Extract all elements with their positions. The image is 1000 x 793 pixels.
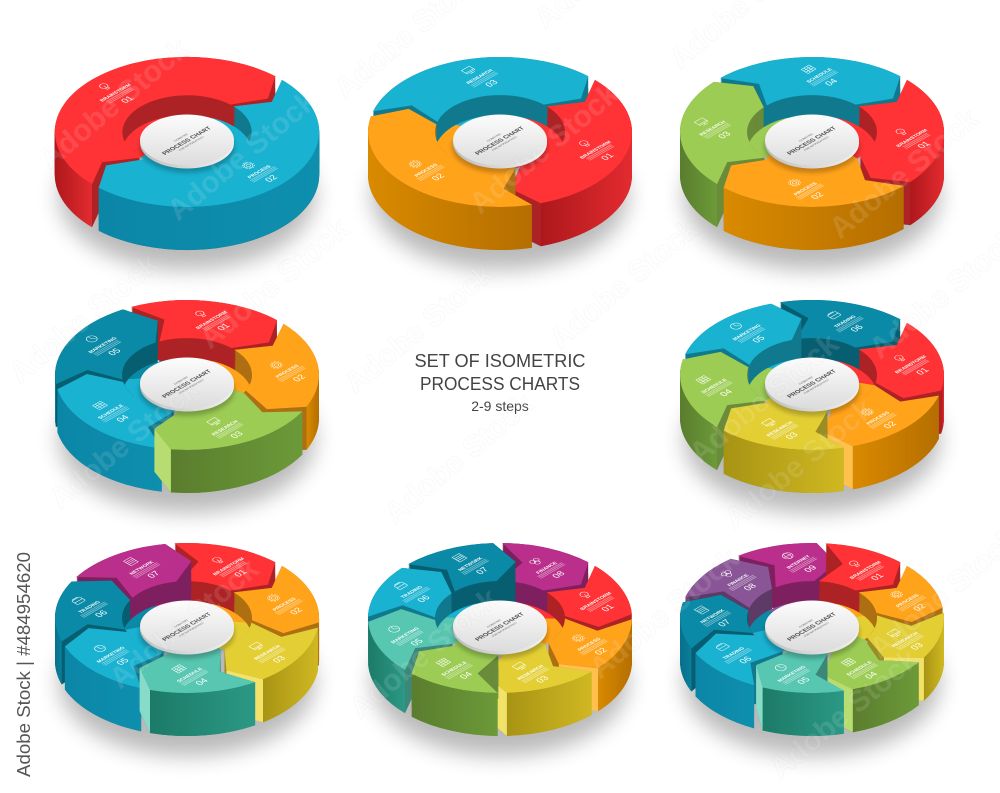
segment 03 research (373, 39, 596, 142)
center disc: ISOMETRIC (172, 619, 189, 628)
segment 01 brainstorm (838, 323, 983, 434)
segment 03 research: RESEARCH (891, 631, 921, 648)
segment 02 process (219, 566, 349, 665)
stock watermark: Adobe Stock (683, 327, 845, 470)
stock watermark: Adobe Stock (103, 552, 265, 695)
segment 07 network (408, 530, 528, 598)
title: 2-9 steps (471, 398, 529, 414)
segment 04 schedule (42, 371, 184, 492)
segment 02 process: 02 (881, 420, 898, 430)
segment 03 research: 03 (908, 641, 926, 651)
segment 04 schedule (809, 636, 919, 732)
stock watermark: Adobe Stock (161, 84, 323, 227)
segment 01 brainstorm (456, 80, 687, 246)
segment 03 research: 03 (228, 430, 245, 440)
segment 02 process: PROCESS (895, 593, 922, 608)
center disc: ISOMETRIC (797, 619, 814, 628)
center disc (452, 600, 548, 659)
segment 05 marketing (749, 647, 844, 736)
segment 02 process: 02 (911, 602, 928, 612)
segment 02 process: PROCESS (576, 637, 603, 652)
segment 07 network: 07 (473, 566, 491, 576)
center disc: FOR INFOGRAPHICS (802, 135, 830, 151)
segment 01 brainstorm: BRAINSTORM (849, 560, 883, 580)
chart: 6 steps (673, 300, 951, 524)
center disc: PROCESS CHART (474, 126, 527, 156)
segment 02 process: PROCESS (247, 164, 274, 180)
segment 03 research: RESEARCH (516, 664, 546, 681)
vertical stock id: Adobe Stock | #484954620 (14, 552, 34, 777)
segment 04 schedule: 04 (823, 77, 840, 87)
segment 02 process: 02 (290, 373, 308, 383)
segment 03 research: RESEARCH (211, 420, 240, 437)
segment 08 finance: FINANCE (726, 573, 751, 588)
segment 01 brainstorm: 01 (232, 568, 249, 578)
segment 05 marketing (345, 602, 465, 713)
segment 02 process: 02 (809, 191, 826, 201)
shadow (684, 365, 940, 513)
segment 02 process: 02 (429, 172, 447, 182)
stock watermark: Adobe Stock (763, 642, 925, 785)
center disc: PROCESS CHART (786, 612, 839, 642)
segment 02 process (850, 566, 961, 629)
segment 02 process: PROCESS (274, 364, 301, 379)
segment 04 schedule: 04 (717, 388, 735, 398)
segment 04 schedule: 04 (193, 677, 210, 687)
segment 04 schedule: 04 (862, 670, 880, 680)
chart: 4 steps (673, 57, 951, 282)
segment 05 marketing: MARKETING (776, 665, 808, 683)
segment 05 marketing: MARKETING (390, 627, 421, 645)
center disc (764, 600, 860, 659)
center disc: PROCESS CHART (161, 612, 214, 642)
shadow (59, 608, 315, 756)
segment 04 schedule: SCHEDULE (805, 67, 835, 84)
segment 05 marketing: 05 (750, 334, 767, 344)
segment 04 schedule: SCHEDULE (700, 378, 730, 395)
segment 01 brainstorm: 01 (915, 140, 932, 150)
segment 07 network (76, 531, 203, 604)
stock watermark: Adobe Stock (583, 542, 745, 685)
segment 03 research (715, 395, 844, 493)
chart: 3 steps (361, 57, 639, 282)
segment 01 brainstorm: BRAINSTORM (579, 591, 614, 611)
shadow (372, 122, 628, 270)
segment 06 trading: TRADING (722, 646, 747, 661)
segment 01 brainstorm: BRAINSTORM (579, 140, 613, 160)
stock watermark: Adobe Stock (543, 212, 705, 355)
center disc: PROCESS CHART (474, 612, 527, 642)
segment 02 process: PROCESS (272, 597, 299, 612)
segment 03 research (626, 73, 822, 227)
stock watermark: Adobe Stock (343, 582, 505, 725)
stock watermark: Adobe Stock (463, 77, 625, 220)
shadow (684, 122, 940, 270)
segment 03 research: 03 (534, 674, 551, 684)
center disc: ISOMETRIC (797, 376, 814, 385)
segment 06 trading (780, 287, 909, 355)
chart: 7 steps (48, 543, 326, 768)
chart: 5 steps (48, 300, 326, 524)
segment 04 schedule (720, 26, 916, 138)
segment 06 trading (31, 573, 145, 685)
title (414, 350, 586, 414)
stock watermark: Adobe Stock (378, 387, 540, 530)
segment 07 network (660, 590, 764, 692)
segment 02 process (200, 324, 367, 450)
segment 08 finance (685, 555, 783, 610)
segment 05 marketing: MARKETING (87, 336, 119, 354)
segment 04 schedule: SCHEDULE (440, 660, 470, 677)
center disc (452, 114, 548, 173)
chart: 2 steps (48, 56, 326, 282)
shadow (372, 608, 628, 756)
segment 02 process: PROCESS (865, 410, 892, 426)
segment 06 trading: TRADING (77, 600, 102, 614)
segment 07 network: NETWORK (128, 560, 156, 576)
segment 05 marketing (50, 622, 172, 731)
segment 08 finance (501, 543, 589, 591)
center disc (139, 358, 235, 416)
stock watermark: Adobe Stock (718, 392, 880, 535)
stock watermark: Adobe Stock (33, 32, 195, 175)
segment 05 marketing: 05 (408, 637, 425, 647)
segment 03 research (472, 638, 592, 736)
chart: 9 steps (673, 543, 951, 768)
segment 01 brainstorm: 01 (599, 152, 616, 162)
inner floor (750, 602, 874, 655)
segment 01 brainstorm: BRAINSTORM (195, 310, 229, 330)
center disc: PROCESS CHART (786, 369, 839, 399)
segment 01 brainstorm (802, 80, 998, 225)
segment 04 schedule: SCHEDULE (176, 667, 205, 684)
segment 03 research: RESEARCH (698, 120, 728, 137)
center disc: FOR INFOGRAPHICS (177, 135, 205, 151)
segment 02 process: 02 (592, 646, 610, 656)
segment 03 research: 03 (270, 654, 288, 664)
segment 01 brainstorm: 01 (599, 603, 616, 613)
segment 05 marketing: 05 (106, 347, 123, 357)
segment 01 brainstorm: BRAINSTORM (212, 557, 246, 577)
segment 02 process: PROCESS (793, 181, 820, 197)
segment 07 network: 07 (716, 618, 733, 628)
segment 06 trading (368, 568, 452, 618)
center disc: FOR INFOGRAPHICS (802, 621, 830, 637)
center disc (764, 114, 860, 173)
segment 01 brainstorm: 01 (914, 366, 931, 376)
stock watermark: Adobe Stock (193, 212, 355, 355)
stock watermark: Adobe Stock (3, 247, 165, 390)
segment 08 finance: FINANCE (535, 561, 560, 575)
shadow (684, 608, 940, 756)
segment 02 process (817, 381, 939, 489)
center disc: ISOMETRIC (172, 376, 189, 385)
center disc: ISOMETRIC (172, 133, 189, 142)
center disc (139, 114, 235, 173)
segment 01 brainstorm: 01 (869, 572, 886, 582)
segment 03 research: RESEARCH (465, 68, 495, 85)
segment 05 marketing: 05 (795, 676, 812, 686)
shadow (59, 122, 315, 270)
segment 01 brainstorm (175, 538, 280, 593)
center disc: PROCESS CHART (161, 126, 214, 156)
inner floor (750, 359, 874, 412)
title: SET OF ISOMETRIC (414, 350, 586, 371)
segment 09 internet: INTERNET (786, 555, 812, 570)
segment 01 brainstorm: BRAINSTORM (894, 355, 928, 375)
inner floor (750, 116, 874, 169)
segment 03 research (864, 613, 949, 701)
inner floor (124, 116, 250, 169)
center disc: FOR INFOGRAPHICS (802, 378, 830, 394)
segment 02 process (708, 126, 904, 250)
segment 06 trading (684, 626, 789, 728)
title: PROCESS CHARTS (420, 373, 580, 394)
segment 04 schedule: 04 (457, 670, 475, 680)
center disc: FOR INFOGRAPHICS (490, 135, 518, 151)
stock watermark: Adobe Stock (43, 372, 205, 515)
segment 06 trading: 06 (415, 594, 432, 604)
segment 01 brainstorm: 01 (215, 322, 232, 332)
segment 05 marketing: MARKETING (732, 324, 763, 342)
segment 01 brainstorm: BRAINSTORM (895, 128, 930, 148)
segment 03 research: RESEARCH (766, 421, 795, 438)
segment 09 internet: 09 (802, 564, 819, 574)
segment 07 network: 07 (145, 570, 162, 579)
inner floor (438, 116, 562, 169)
segment 08 finance: 08 (741, 582, 759, 592)
segment 02 process: PROCESS (413, 163, 440, 178)
segment 04 schedule: SCHEDULE (845, 660, 875, 677)
segment 03 research: 03 (716, 130, 733, 140)
segment 01 brainstorm (0, 26, 291, 227)
center disc: PROCESS CHART (161, 369, 214, 399)
center disc: PROCESS CHART (786, 126, 839, 156)
inner floor (124, 602, 250, 655)
inner floor (124, 358, 250, 412)
segment 02 process (357, 98, 532, 250)
segment 09 internet (738, 531, 847, 593)
segment 04 schedule: 04 (114, 414, 131, 423)
center disc: ISOMETRIC (485, 133, 502, 142)
segment 05 marketing: MARKETING (96, 646, 127, 664)
segment 06 trading: 06 (93, 609, 110, 619)
segment 01 brainstorm: 01 (119, 95, 136, 104)
segment 07 network: NETWORK (699, 608, 727, 624)
center disc: ISOMETRIC (797, 133, 814, 142)
center disc (764, 358, 860, 416)
segment 08 finance: 08 (550, 570, 567, 580)
segment 06 trading: TRADING (833, 315, 858, 329)
segment 02 process (548, 618, 632, 711)
stock watermark: Adobe Stock (338, 257, 500, 400)
segment 05 marketing (41, 307, 170, 427)
segment 01 brainstorm: BRAINSTORM (99, 83, 133, 103)
segment 05 marketing: 05 (114, 657, 131, 666)
center disc: FOR INFOGRAPHICS (177, 378, 205, 394)
segment 02 process: 02 (287, 606, 305, 616)
segment 03 research: 03 (783, 431, 800, 441)
center disc: FOR INFOGRAPHICS (490, 621, 518, 637)
center disc: ISOMETRIC (485, 619, 502, 628)
segment 04 schedule (411, 645, 499, 736)
segment 01 brainstorm (131, 278, 291, 366)
segment 03 research: 03 (483, 78, 500, 88)
segment 04 schedule: SCHEDULE (97, 403, 126, 420)
center disc: FOR INFOGRAPHICS (177, 621, 205, 637)
segment 03 research (143, 380, 302, 493)
stock watermark: Adobe Stock (823, 102, 985, 245)
chart: 8 steps (361, 543, 639, 768)
shadow (59, 365, 315, 513)
segment 03 research: RESEARCH (253, 644, 283, 661)
segment 06 trading: 06 (737, 655, 754, 665)
segment 06 trading: 06 (848, 323, 865, 333)
inner floor (438, 602, 562, 655)
segment 05 marketing (685, 295, 807, 369)
segment 02 process (83, 74, 374, 250)
segment 03 research (218, 621, 318, 722)
segment 04 schedule (126, 639, 255, 736)
segment 04 schedule (641, 345, 786, 470)
segment 06 trading: TRADING (400, 585, 425, 599)
center disc (139, 600, 235, 659)
segment 01 brainstorm (535, 566, 655, 634)
segment 02 process: 02 (262, 174, 280, 183)
segment 01 brainstorm (817, 543, 903, 593)
segment 07 network: NETWORK (457, 556, 485, 572)
